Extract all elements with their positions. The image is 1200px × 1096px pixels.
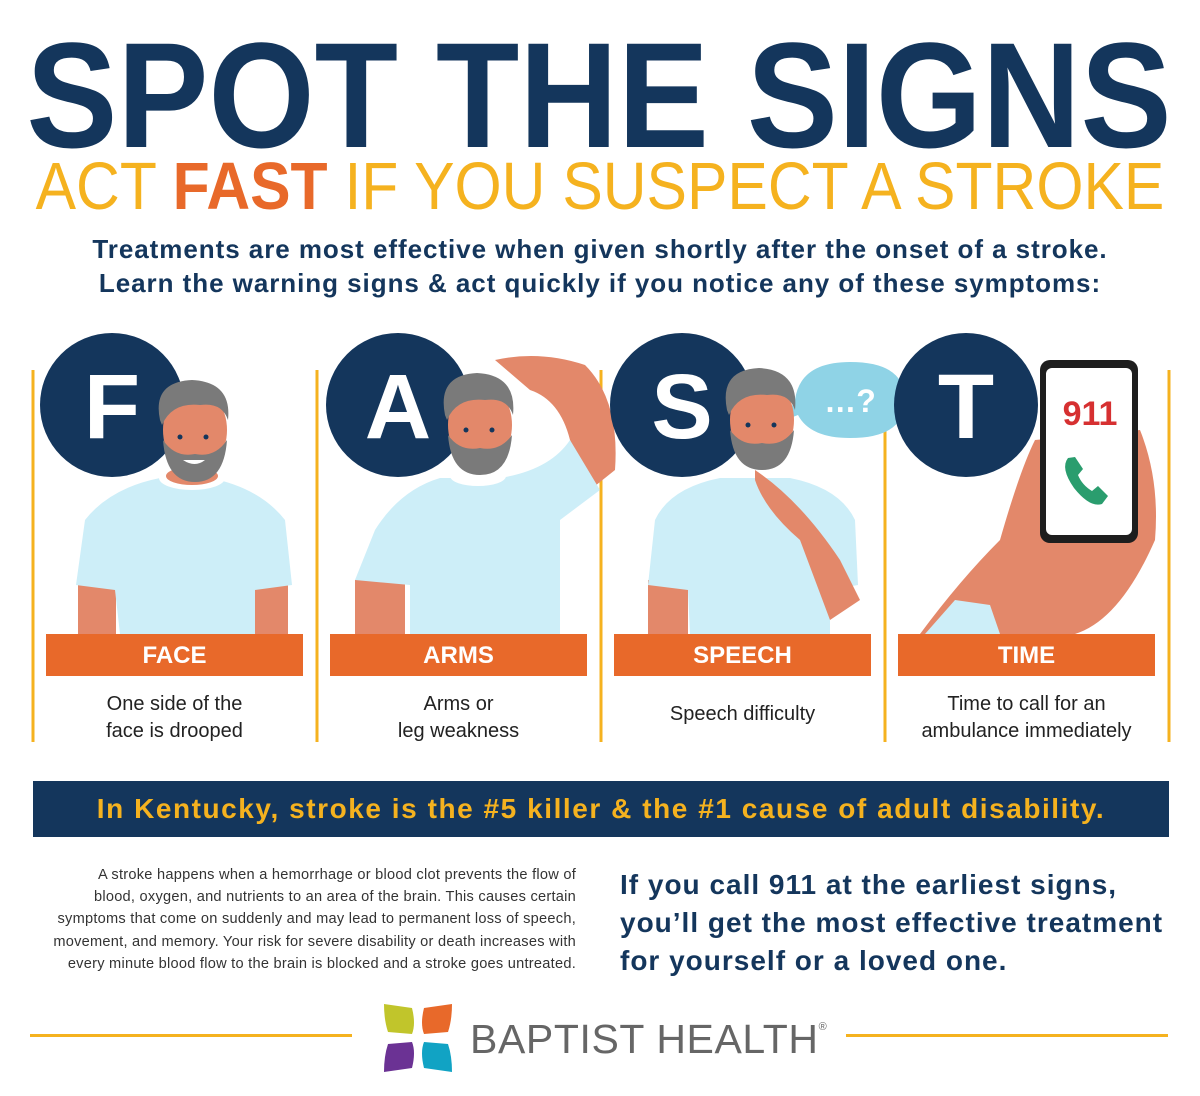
callout	[620, 869, 1163, 976]
paragraph: A stroke happens when a hemorrhage or blood clot prevents the flow of	[98, 867, 576, 883]
label: time	[898, 634, 1155, 676]
desc: speech: Speech difficulty	[670, 703, 815, 725]
callout: If you call 911 at the earliest signs,	[620, 869, 1117, 900]
logo	[384, 1004, 827, 1072]
panel: time figure: 911	[1063, 395, 1117, 433]
label: face	[46, 634, 303, 676]
paragraph: every minute blood flow to the brain is blocked and a stroke goes untreated.	[68, 956, 576, 972]
icon: logo leaves	[384, 1004, 452, 1072]
desc: face: face is drooped	[106, 720, 243, 742]
FAST illustrations	[32, 333, 1170, 742]
label: arms	[330, 634, 587, 676]
desc: arms	[398, 693, 519, 742]
panel: arms figure: A	[365, 356, 431, 458]
label: time: TIME	[998, 642, 1055, 669]
intro text	[92, 234, 1108, 298]
paragraph	[53, 867, 576, 972]
intro text: Treatments are most effective when given shortly after the onset of a stroke.	[92, 234, 1108, 264]
desc: arms: leg weakness	[398, 720, 519, 742]
panel: face figure	[40, 333, 292, 634]
panel: arms figure	[326, 333, 616, 634]
panel: time figure	[894, 333, 1156, 634]
panel: speech figure: S	[651, 356, 713, 458]
panel: speech figure	[610, 333, 905, 634]
desc: time: Time to call for an	[947, 693, 1106, 715]
logo: BAPTIST HEALTH®	[470, 1016, 827, 1062]
desc: time	[921, 693, 1132, 742]
label: face: FACE	[142, 642, 206, 669]
label: arms: ARMS	[423, 642, 494, 669]
banner	[33, 781, 1169, 837]
desc: face: One side of the	[107, 693, 242, 715]
panel: speech figure: …?	[824, 383, 876, 419]
banner: In Kentucky, stroke is the #5 killer & the #1 cause of adult disability.	[97, 793, 1105, 824]
desc: arms: Arms or	[424, 693, 494, 715]
label: speech	[614, 634, 871, 676]
intro text: Learn the warning signs & act quickly if you notice any of these symptoms:	[99, 268, 1101, 298]
desc: face	[106, 693, 243, 742]
label: speech: SPEECH	[693, 642, 792, 669]
callout: you’ll get the most effective treatment	[620, 907, 1163, 938]
title: SPOT THE SIGNS	[26, 11, 1172, 179]
paragraph: symptoms that come on suddenly and may lead to permanent loss of speech,	[57, 911, 576, 927]
panel: face figure: F	[84, 356, 140, 458]
paragraph: blood, oxygen, and nutrients to an area of the brain. This causes certain	[94, 889, 576, 905]
panel: time figure: T	[938, 356, 994, 458]
speech bubble	[785, 362, 905, 438]
callout: for yourself or a loved one.	[620, 945, 1007, 976]
paragraph: movement, and memory. Your risk for severe disability or death increases with	[53, 934, 576, 950]
subtitle: ACT FAST IF YOU SUSPECT A STROKE	[36, 149, 1164, 224]
desc: time: ambulance immediately	[921, 720, 1132, 742]
